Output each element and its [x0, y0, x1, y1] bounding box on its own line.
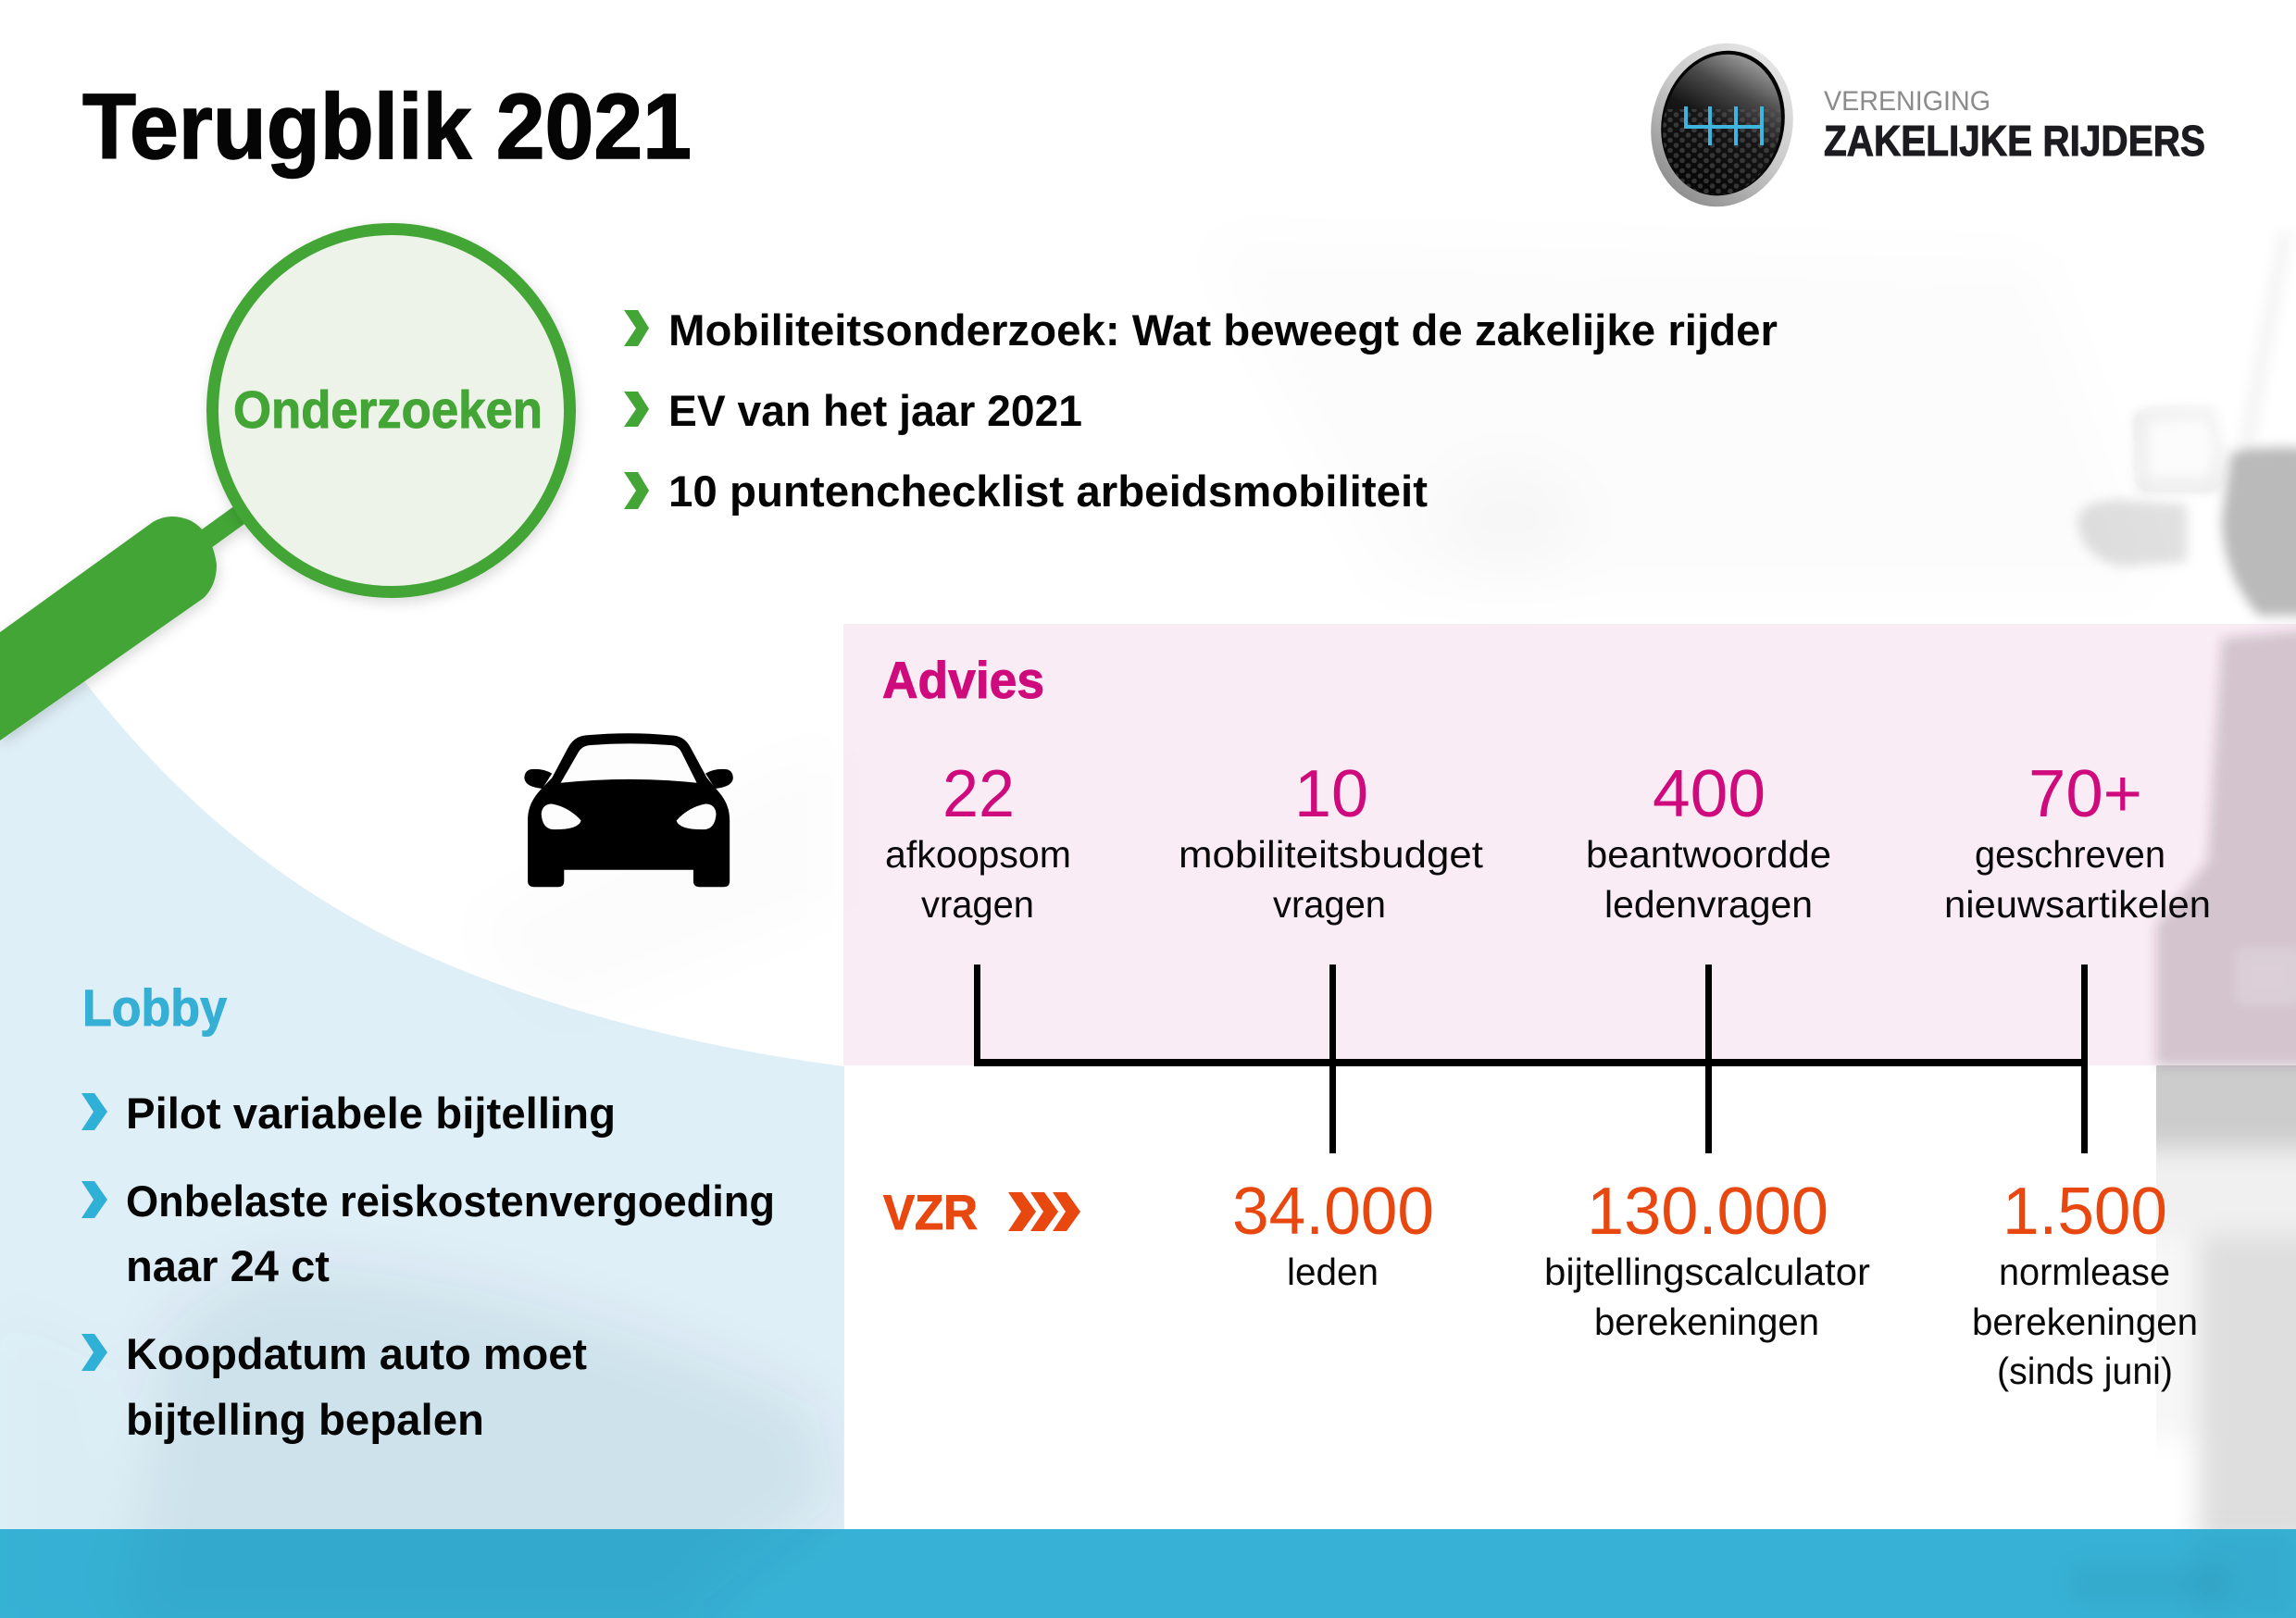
stat: 22 afkoopsom vragen: 22 [942, 757, 1015, 831]
stat: 400 beantwoordde ledenvragen: 400 [1653, 757, 1766, 831]
magnifier handle [0, 505, 244, 741]
stat: 70+ geschreven nieuwsartikelen: nieuwsartikelen [1944, 883, 2211, 926]
bullet: checklist: 10 puntenchecklist arbeidsmobiliteit [668, 467, 1428, 516]
advies stats [885, 757, 2211, 926]
lobby bullet: reiskostenvergoeding [81, 1176, 775, 1290]
title: Terugblik 2021 [82, 75, 692, 179]
lens label: Onderzoeken [233, 380, 543, 440]
stat: 130.000 bijtellingscalculator berekeningen: 130.000 [1587, 1175, 1828, 1249]
stat: 130.000 bijtellingscalculator berekeningen: berekeningen [1594, 1301, 1819, 1343]
magnifier lens [213, 230, 570, 592]
magnifying glass: Onderzoeken [0, 230, 570, 741]
bullet: mobiliteitsonderzoek: Mobiliteitsonderzoek: Wat beweegt de zakelijke rijder [668, 305, 1778, 355]
stat: 34.000 leden: 34.000 [1232, 1175, 1434, 1249]
right car: lower bodywork [2156, 1065, 2296, 1529]
stat: 1.500 normlease berekeningen [1972, 1175, 2198, 1392]
lobby bullet: reiskostenvergoeding: naar 24 ct [126, 1241, 330, 1290]
stat: 400 beantwoordde ledenvragen: ledenvragen [1604, 883, 1813, 926]
onderzoeken list [624, 305, 1778, 516]
stat: 1.500 normlease berekeningen: normlease [1999, 1251, 2170, 1293]
stat: 70+ geschreven nieuwsartikelen [1944, 757, 2211, 926]
VZR stats [1232, 1175, 2198, 1392]
advies heading: Advies [882, 651, 1044, 709]
stat: 34.000 leden: leden [1287, 1251, 1379, 1293]
stat: 22 afkoopsom vragen: vragen [921, 883, 1034, 926]
timeline connector [974, 965, 2088, 1153]
right car: footer shade [2072, 1529, 2296, 1618]
stat: 130.000 bijtellingscalculator berekeningen [1544, 1175, 1870, 1343]
lobby bullet: koopdatum [81, 1329, 587, 1444]
stat: 1.500 normlease berekeningen: 1.500 [2003, 1175, 2167, 1249]
footer band [0, 1529, 2296, 1618]
stat: 22 afkoopsom vragen [885, 757, 1071, 926]
lobby bullet: pilot: Pilot variabele bijtelling [126, 1089, 616, 1138]
stat: 10 mobiliteitsbudget vragen: 10 [1294, 757, 1368, 831]
stat: 22 afkoopsom vragen: afkoopsom [885, 833, 1071, 876]
faded background photo of cars [124, 405, 2296, 1609]
bullet: EV van het jaar: EV van het jaar 2021 [668, 386, 1082, 435]
logo wordmark top: VERENIGING [1824, 86, 1990, 117]
stat: 400 beantwoordde ledenvragen [1586, 757, 1831, 926]
lobby bullet: koopdatum: bijtelling bepalen [126, 1395, 484, 1444]
stat: 10 mobiliteitsbudget vragen: vragen [1273, 883, 1386, 926]
panel: lobby [81, 978, 775, 1444]
logo wordmark bottom: ZAKELIJKE RIJDERS [1824, 117, 2205, 165]
lobby bullet: reiskostenvergoeding: Onbelaste reiskostenvergoeding [126, 1176, 775, 1226]
stat: 34.000 leden [1232, 1175, 1434, 1293]
right car: upper bodywork [2078, 231, 2296, 1065]
stat: 1.500 normlease berekeningen: berekeningen [1972, 1301, 2198, 1343]
stat: 1.500 normlease berekeningen: (sinds juni) [1997, 1350, 2173, 1392]
VZR heading: VZR [883, 1186, 978, 1240]
icon: triple chevron [1008, 1192, 1080, 1231]
lobby bullet: koopdatum: Koopdatum auto moet [126, 1329, 587, 1378]
stat: 400 beantwoordde ledenvragen: beantwoordde [1586, 833, 1831, 876]
logo: Vereniging Zakelijke Rijders [1651, 43, 2204, 207]
stat: 70+ geschreven nieuwsartikelen: geschreven [1975, 833, 2165, 876]
stat: 10 mobiliteitsbudget vragen: mobiliteitsbudget [1179, 833, 1484, 876]
panel: advies background [843, 624, 2296, 1065]
VZR label with arrows [883, 1186, 1080, 1240]
logo badge [1651, 43, 1793, 207]
stat: 130.000 bijtellingscalculator berekeningen: bijtellingscalculator [1544, 1251, 1870, 1293]
panel: lobby background [0, 648, 844, 1529]
lobby heading: Lobby [82, 978, 227, 1037]
icon: car [524, 733, 733, 887]
stat: 10 mobiliteitsbudget vragen [1179, 757, 1484, 926]
stat: 70+ geschreven nieuwsartikelen: 70+ [2028, 757, 2142, 831]
left car: shade in lobby panel [124, 1267, 828, 1588]
